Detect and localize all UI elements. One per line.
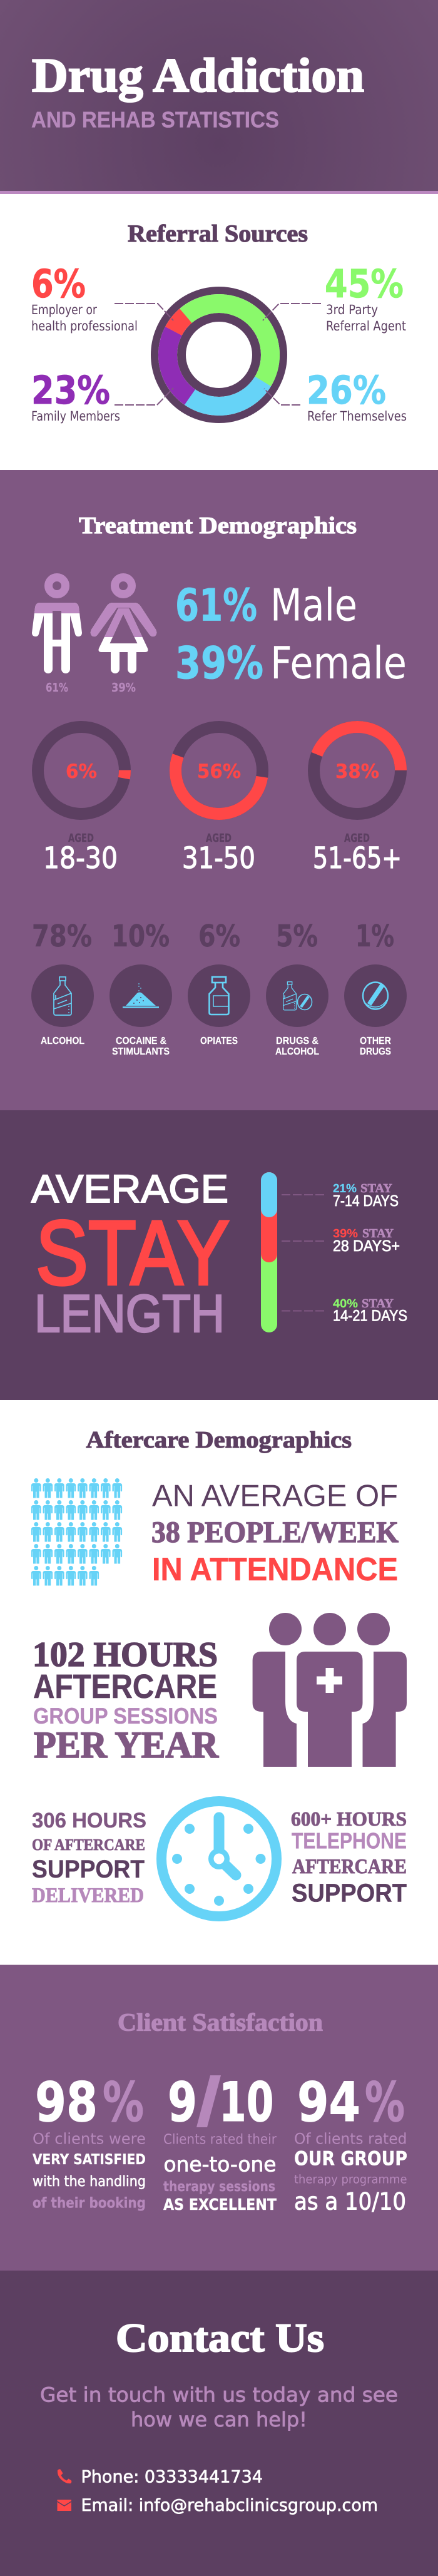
donut: aged 31-50: 56% xyxy=(197,760,241,783)
text block: aftercare group sessions: PER YEAR xyxy=(34,1724,219,1766)
drug stat: cocaine and stimulants xyxy=(109,919,172,1057)
text block: average attendance xyxy=(151,1480,399,1588)
text block: 600+ hours: 600+ HOURS xyxy=(291,1807,407,1830)
heading: length: LENGTH xyxy=(34,1284,225,1344)
panel: treatment demographics xyxy=(0,470,438,1110)
text: email address: Email: info@rehabclinicsgroup.com xyxy=(81,2496,378,2515)
stat: 94%: Of clients rated xyxy=(294,2130,407,2148)
stat: 39% female xyxy=(175,637,407,689)
chart: stay length bar xyxy=(261,1172,277,1332)
icon: pill xyxy=(363,983,388,1009)
text: phone number: Phone: 03333441734 xyxy=(81,2467,263,2487)
text block: average attendance: 38 PEOPLE/WEEK xyxy=(151,1516,399,1549)
stat: 94%: OUR GROUP xyxy=(294,2148,407,2170)
text: get in touch: Get in touch with us today and see xyxy=(40,2383,398,2407)
text block: 306 hours: OF AFTERCARE xyxy=(32,1836,145,1854)
text block: 306 hours: 306 HOURS xyxy=(32,1809,146,1832)
icon: male figure: 61% xyxy=(46,681,68,695)
icon: medicine bottle xyxy=(209,977,229,1015)
drug stat: drugs and alcohol xyxy=(266,919,328,1057)
callout: 45% third party: Referral Agent xyxy=(326,319,406,334)
stat: 94%: 94 xyxy=(297,2070,360,2134)
stat: 9/10 xyxy=(163,2070,277,2214)
stat: 94%: % xyxy=(365,2070,405,2134)
drug stat: cocaine and stimulants: STIMULANTS xyxy=(112,1046,170,1057)
callout: 45% third party: 45% xyxy=(325,261,404,307)
drug stat: opiates: OPIATES xyxy=(200,1036,238,1046)
donut chart: referral sources xyxy=(146,282,292,427)
text block: 306 hours: SUPPORT xyxy=(32,1856,145,1883)
donut: aged 31-50 xyxy=(169,720,269,876)
donut: aged 51-65+ xyxy=(301,714,414,876)
icon: alcohol bottle xyxy=(54,977,71,1015)
text block: average attendance: AN AVERAGE OF xyxy=(152,1480,398,1513)
icon: female figure xyxy=(91,577,156,695)
callout: 6% employer xyxy=(31,261,173,334)
text: get in touch xyxy=(40,2383,398,2431)
stat: 9/10: one-to-one xyxy=(164,2152,277,2177)
drug stat: other drugs: OTHER xyxy=(360,1036,391,1046)
callout: 39% stay 28 days+: STAY xyxy=(362,1227,394,1240)
icon: phone xyxy=(58,2469,71,2483)
stat: 98%: % xyxy=(103,2070,144,2134)
callout: 45% third party xyxy=(263,261,406,334)
text block: 600+ hours: AFTERCARE xyxy=(292,1856,407,1878)
stat: 61% male xyxy=(175,580,357,631)
text block: aftercare group sessions: AFTERCARE xyxy=(33,1668,217,1705)
callout: 21% stay 7-14 days: 21% xyxy=(333,1182,357,1195)
callout: 26% refer themselves: 26% xyxy=(307,367,386,413)
stat: 39% female: 39% xyxy=(175,637,263,689)
callout: 39% stay 28 days+ xyxy=(282,1227,400,1255)
callout: 6% employer: Employer or xyxy=(31,302,97,317)
panel: header xyxy=(0,0,438,194)
callout: 40% stay 14-21 days xyxy=(282,1297,407,1324)
donut: aged 18-30 xyxy=(38,727,125,876)
callout: 21% stay 7-14 days xyxy=(282,1182,399,1210)
text block: 306 hours xyxy=(32,1809,146,1907)
stat: 9/10: 10 xyxy=(219,2070,274,2134)
drug stat: opiates: 6% xyxy=(198,919,240,954)
stat: 98%: with the handling xyxy=(33,2174,146,2190)
stat: 94%: as a 10/10 xyxy=(294,2188,406,2216)
drug stat: drugs and alcohol: ALCOHOL xyxy=(275,1046,319,1057)
callout: 21% stay 7-14 days: STAY xyxy=(360,1182,393,1195)
subtitle: AND REHAB STATISTICS xyxy=(31,106,279,133)
donut: aged 51-65+: 51-65+ xyxy=(313,841,402,876)
callout: 23% family xyxy=(31,367,173,424)
drug stat: drugs and alcohol: DRUGS & xyxy=(276,1036,318,1046)
stat: 9/10: therapy sessions xyxy=(163,2179,275,2195)
callout: 6% employer: health professional xyxy=(31,319,138,334)
stat: 9/10: 9 xyxy=(168,2070,197,2134)
stat: 94% xyxy=(294,2070,407,2216)
icon grid: 38 people xyxy=(31,1478,122,1586)
text block: 600+ hours xyxy=(291,1807,407,1908)
text block: aftercare group sessions: GROUP SESSIONS xyxy=(33,1703,218,1729)
donut: aged 51-65+: AGED xyxy=(344,832,370,845)
stat: 61% male: 61% xyxy=(175,580,257,631)
callout: 6% employer: 6% xyxy=(31,261,86,307)
panel: referral sources xyxy=(0,194,438,470)
panel: average stay length xyxy=(0,1110,438,1400)
drug stat: other drugs: 1% xyxy=(355,919,394,954)
callout: 40% stay 14-21 days: 40% xyxy=(333,1297,358,1311)
text: get in touch: how we can help! xyxy=(131,2408,307,2431)
stat: 98%: VERY SATISFIED xyxy=(33,2152,146,2168)
drug stat: opiates xyxy=(188,919,250,1046)
text block: 600+ hours: TELEPHONE xyxy=(292,1827,407,1854)
icon: clock xyxy=(161,1801,277,1916)
donut: aged 18-30: AGED xyxy=(68,832,94,845)
text block: 600+ hours: SUPPORT xyxy=(292,1879,407,1908)
callout: 40% stay 14-21 days: 14-21 DAYS xyxy=(333,1307,407,1324)
stat: 61% male: Male xyxy=(270,580,357,631)
callout: 23% family: Family Members xyxy=(31,409,120,424)
icon: three people with medical cross xyxy=(253,1613,407,1767)
callout: 21% stay 7-14 days: 7-14 DAYS xyxy=(333,1192,399,1210)
callout: 26% refer themselves: Refer Themselves xyxy=(307,409,407,424)
donut: aged 31-50: AGED xyxy=(206,832,232,845)
donut: aged 31-50: 31-50 xyxy=(182,841,255,876)
text block: average attendance: IN ATTENDANCE xyxy=(152,1551,398,1588)
icon: email envelope xyxy=(58,2500,71,2511)
icon: powder pile xyxy=(123,983,159,1008)
callout: 23% family: 23% xyxy=(31,367,110,413)
donut: aged 18-30: 6% xyxy=(66,760,97,783)
title: Drug Addiction xyxy=(32,48,364,102)
heading: referral sources: Referral Sources xyxy=(128,220,308,247)
stat: 98%: 98 xyxy=(35,2070,98,2134)
heading: stay: STAY xyxy=(36,1202,230,1304)
panel: client satisfaction xyxy=(0,1965,438,2271)
heading: treatment demographics: Treatment Demographics xyxy=(79,513,357,539)
callout: 39% stay 28 days+: 28 DAYS+ xyxy=(333,1237,400,1255)
callout: 26% refer themselves xyxy=(264,367,407,424)
drug stat: other drugs xyxy=(344,919,407,1057)
stat: 98%: of their booking xyxy=(33,2195,146,2212)
stat: 94%: therapy programme xyxy=(294,2173,407,2187)
callout: 45% third party: 3rd Party xyxy=(326,302,378,317)
stat: 9/10: Clients rated their xyxy=(163,2132,277,2148)
donut: aged 18-30: 18-30 xyxy=(43,841,118,876)
heading: average: AVERAGE xyxy=(31,1167,228,1211)
text block: 306 hours: DELIVERED xyxy=(32,1884,144,1907)
donut: aged 51-65+: 38% xyxy=(335,760,379,783)
panel: contact xyxy=(0,2271,438,2576)
stat: 98% xyxy=(33,2070,146,2212)
callout: 40% stay 14-21 days: STAY xyxy=(362,1297,394,1311)
stat: 98%: Of clients were xyxy=(33,2130,146,2148)
drug stat: drugs and alcohol: 5% xyxy=(276,919,318,954)
stat: 39% female: Female xyxy=(270,637,407,689)
drug stat: alcohol xyxy=(31,919,94,1046)
stat: 9/10: AS EXCELLENT xyxy=(163,2195,277,2214)
text block: aftercare group sessions xyxy=(33,1635,219,1766)
icon: bottle and pill xyxy=(283,982,312,1010)
heading: contact us: Contact Us xyxy=(116,2316,324,2361)
drug stat: other drugs: DRUGS xyxy=(360,1046,391,1057)
drug stat: alcohol: 78% xyxy=(32,919,92,954)
text block: aftercare group sessions: 102 HOURS xyxy=(33,1635,218,1674)
heading: client satisfaction: Client Satisfaction xyxy=(118,2008,323,2037)
icon: female figure: 39% xyxy=(111,681,136,695)
callout: 39% stay 28 days+: 39% xyxy=(333,1227,358,1240)
drug stat: alcohol: ALCOHOL xyxy=(41,1036,84,1046)
drug stat: cocaine and stimulants: 10% xyxy=(111,919,170,954)
drug stat: cocaine and stimulants: COCAINE & xyxy=(116,1036,166,1046)
panel: aftercare demographics xyxy=(0,1400,438,1965)
heading: aftercare demographics: Aftercare Demographics xyxy=(86,1427,352,1453)
icon: male figure xyxy=(32,577,82,695)
